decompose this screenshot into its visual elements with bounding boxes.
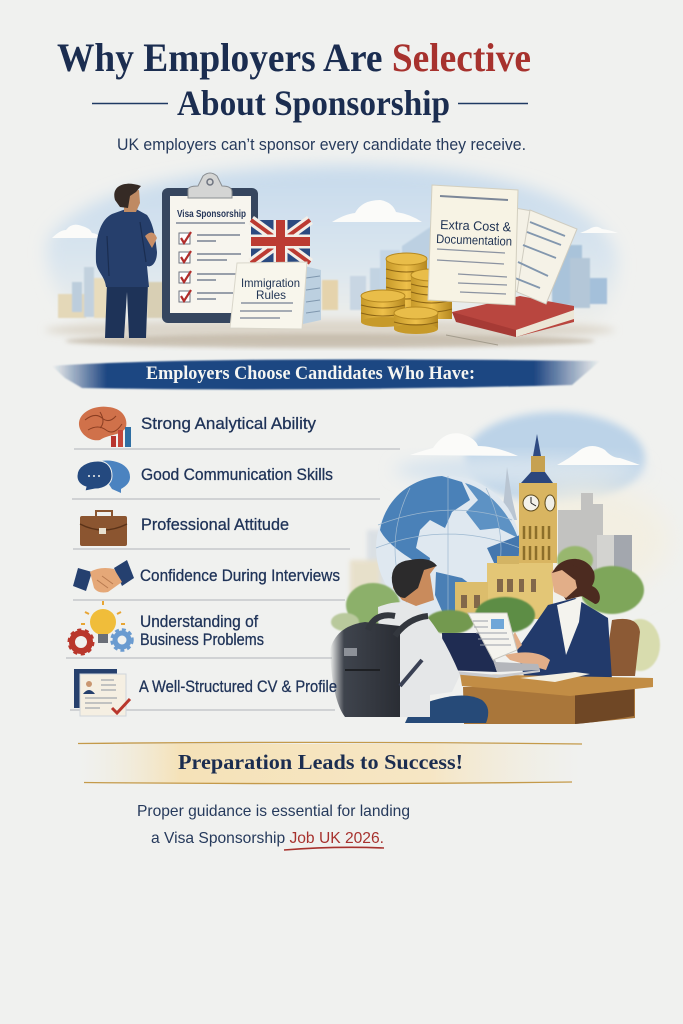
extra cost document: Extra Cost & [440,217,512,234]
distant spire [501,467,517,520]
laptop and papers [440,613,540,678]
ground [45,320,615,348]
item: confidence [73,560,340,592]
icon: handshake [73,560,134,592]
extra cost document [428,185,518,305]
clipboard [162,173,258,323]
item: attitude: Professional Attitude [141,515,289,534]
immigration rules note: Rules [256,288,286,302]
item: attitude [80,511,289,546]
section banner [52,359,600,389]
icon: CV document [74,669,130,716]
student with backpack [330,559,488,723]
section banner: Employers Choose Candidates Who Have: [146,363,475,384]
immigration rules note [230,262,321,329]
icon: speech bubbles [77,461,130,493]
sky wash [47,166,617,330]
title [57,35,531,123]
item: analytical: Strong Analytical Ability [141,414,316,433]
illustration: sponsorship challenges [45,166,618,348]
item: analytical [79,407,316,447]
item: business problems: Understanding of [140,612,258,631]
icon: lightbulb and gears [69,601,132,654]
closing text: a Visa Sponsorship Job UK 2026. [151,830,384,847]
item: business problems [69,601,264,654]
gray buildings [558,493,632,577]
clipboard: Visa Sponsorship [177,209,246,220]
immigration rules note: Immigration [241,276,300,290]
clock tower and building [455,434,557,619]
dividers [66,449,400,710]
skyline left [58,267,386,318]
icon: briefcase [80,511,127,546]
closing text: Proper guidance is essential for landing [137,803,410,820]
callout banner [78,742,582,784]
item: confidence: Confidence During Interviews [140,566,340,585]
item: business problems: Business Problems [140,630,264,649]
title: Why Employers Are Selective [57,35,531,80]
item: CV [74,669,337,716]
item: communication: Good Communication Skills [141,465,333,484]
back papers [510,208,577,304]
benefit list [66,407,400,716]
title: About Sponsorship [177,83,450,123]
man in suit [96,184,157,338]
item: communication [77,461,333,493]
UK flag [251,220,310,263]
skyline right [380,226,607,308]
woman at desk [505,559,640,680]
desk [460,672,653,724]
callout banner: Preparation Leads to Success! [178,750,463,774]
faded buildings left [350,530,387,596]
closing text [137,803,410,850]
red book [446,296,574,345]
trees [331,546,660,671]
clouds [52,200,618,238]
extra cost document: Documentation [436,232,512,249]
globe [376,476,520,620]
illustration: office interview [330,412,670,724]
clouds [410,433,640,465]
sky [395,412,670,595]
item: CV: A Well-Structured CV & Profile [139,677,337,696]
subtitle: UK employers can’t sponsor every candidate they receive. [117,136,526,154]
gold coins [361,253,452,334]
icon: brain with chart [79,407,131,447]
